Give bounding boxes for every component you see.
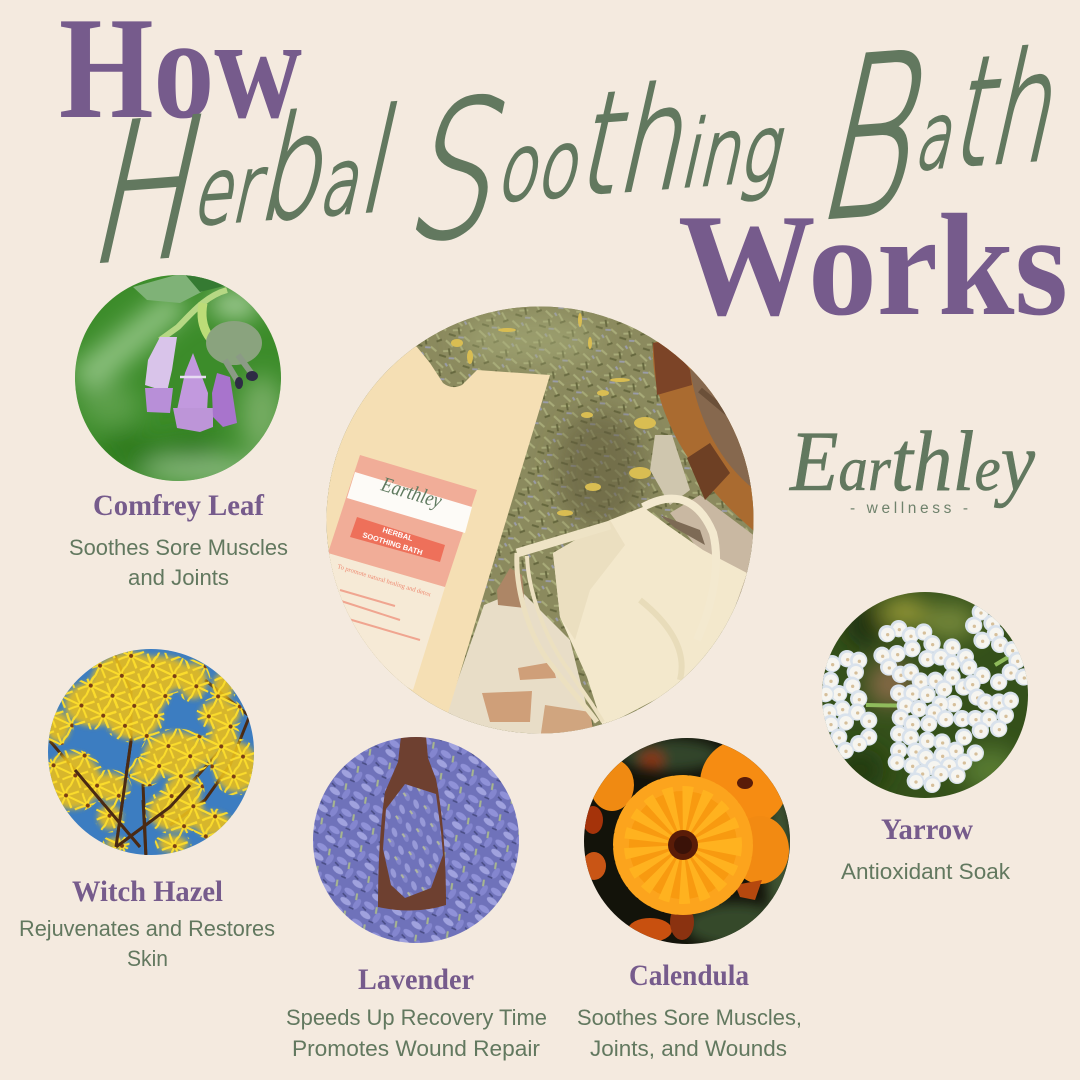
photo: calendula bbox=[580, 735, 795, 950]
wooden bowl bbox=[652, 342, 754, 530]
kraft bag bbox=[320, 335, 550, 713]
label: Witch Hazel: Witch Hazel bbox=[72, 875, 223, 908]
logo: Earthley wellness: Earthley bbox=[788, 413, 1036, 509]
label: Calendula: Joints, and Wounds bbox=[590, 1036, 787, 1061]
label: Lavender: Speeds Up Recovery Time bbox=[286, 1005, 547, 1030]
label: Yarrow: Antioxidant Soak bbox=[841, 859, 1011, 884]
title: Herbal Soothing Bath script: S bbox=[393, 57, 528, 285]
label: Witch Hazel bbox=[19, 875, 275, 971]
title: Herbal Soothing Bath script: er bbox=[187, 135, 275, 246]
title: Herbal Soothing Bath script: oo bbox=[490, 110, 594, 223]
label: Comfrey Leaf: Soothes Sore Muscles bbox=[69, 535, 288, 560]
photo: yarrow bbox=[817, 590, 1035, 805]
title: Herbal Soothing Bath script: bal bbox=[248, 77, 425, 254]
label: Calendula bbox=[577, 959, 802, 1061]
photo: product with bag, herbs, bowl and sachet: Earthley bbox=[378, 472, 445, 513]
label: Yarrow: Yarrow bbox=[881, 813, 973, 846]
label: Comfrey Leaf: and Joints bbox=[128, 565, 229, 590]
title: Herbal Soothing Bath script: a bbox=[909, 82, 968, 191]
bag label bbox=[328, 455, 477, 587]
label: Lavender bbox=[286, 963, 547, 1061]
title: Herbal Soothing Bath script: H bbox=[75, 76, 225, 308]
label: Calendula: Soothes Sore Muscles, bbox=[577, 1005, 802, 1030]
label: Lavender: Promotes Wound Repair bbox=[292, 1036, 540, 1061]
label: Witch Hazel: Skin bbox=[127, 946, 168, 971]
whitewashed brick surface bbox=[447, 594, 592, 734]
title: Works: Works bbox=[678, 184, 1068, 346]
photo: product with bag, herbs, bowl and sachet: To promote natural healing and detox bbox=[336, 563, 432, 599]
title: Herbal Soothing Bath script bbox=[75, 0, 1080, 308]
logo: Earthley wellness: - wellness - bbox=[850, 500, 968, 517]
muslin sachet bbox=[553, 507, 747, 727]
photo: product with bag, herbs, bowl and sachet: HERBAL bbox=[381, 525, 414, 543]
label: Comfrey Leaf bbox=[69, 489, 288, 590]
yellow calendula petals in the herbs bbox=[451, 313, 656, 516]
photo: comfrey leaf bbox=[75, 275, 281, 481]
title: Herbal Soothing Bath script: thing bbox=[567, 51, 833, 229]
photo: witch hazel bbox=[45, 645, 260, 860]
label: Lavender: Lavender bbox=[358, 963, 474, 996]
label: Comfrey Leaf: Comfrey Leaf bbox=[93, 489, 265, 522]
photo: lavender bbox=[310, 735, 525, 950]
label: Calendula: Calendula bbox=[629, 959, 749, 992]
label: Yarrow bbox=[841, 813, 1011, 884]
photo: product with bag, herbs, bowl and sachet bbox=[326, 306, 754, 734]
photo: product with bag, herbs, bowl and sachet: SOOTHING BATH bbox=[361, 530, 424, 557]
label: Witch Hazel: Rejuvenates and Restores bbox=[19, 916, 275, 941]
title: Herbal Soothing Bath script: B bbox=[800, 5, 951, 273]
